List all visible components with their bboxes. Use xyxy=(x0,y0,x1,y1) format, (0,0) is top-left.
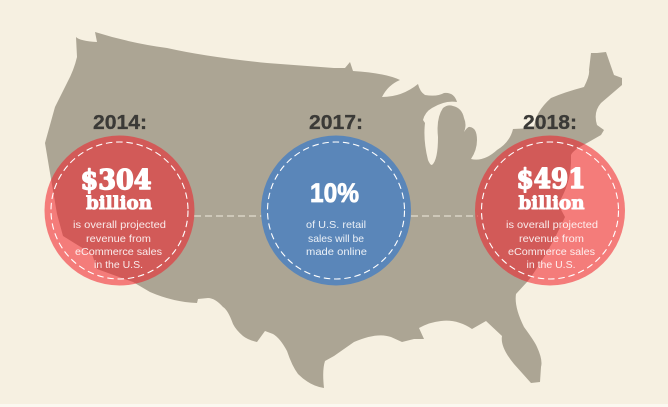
figure: $304 billion xyxy=(80,165,152,214)
description: 2018: is overall projected xyxy=(506,219,598,231)
description: 2018 xyxy=(506,219,598,271)
figure: $491 billion: billion xyxy=(518,194,585,214)
figure: 10%: 10% xyxy=(310,178,359,208)
connector: 2017 to 2018 xyxy=(411,215,478,217)
description: 2014: eCommerce sales xyxy=(75,246,162,258)
description: 2014: is overall projected xyxy=(73,219,166,231)
year label: 2014: 2014: xyxy=(93,112,147,134)
circle: 2014 revenue xyxy=(44,136,194,286)
figure: $304 billion: billion xyxy=(86,194,152,214)
circle: 2017 share xyxy=(261,136,411,286)
description: 2017 xyxy=(306,219,367,258)
description: 2018: eCommerce sales xyxy=(508,246,595,258)
description: 2014: revenue from xyxy=(86,233,151,245)
year label: 2018: 2018: xyxy=(523,112,577,134)
description: 2018: revenue from xyxy=(519,233,584,245)
description: 2014: in the U.S. xyxy=(94,259,143,271)
description: 2017: sales will be xyxy=(308,233,364,245)
description: 2017: of U.S. retail xyxy=(306,219,366,231)
figure: $491 billion: $491 xyxy=(516,164,586,195)
description: 2017: made online xyxy=(306,246,367,258)
description: 2018: in the U.S. xyxy=(526,259,576,271)
connector: 2014 to 2017 xyxy=(194,215,262,217)
year label: 2017: 2017: xyxy=(309,112,363,134)
description: 2014 xyxy=(73,219,166,271)
map: United States xyxy=(45,32,622,388)
figure: $491 billion xyxy=(516,164,586,214)
figure: $304 billion: $304 xyxy=(80,165,152,196)
circle: 2018 revenue xyxy=(475,136,625,286)
